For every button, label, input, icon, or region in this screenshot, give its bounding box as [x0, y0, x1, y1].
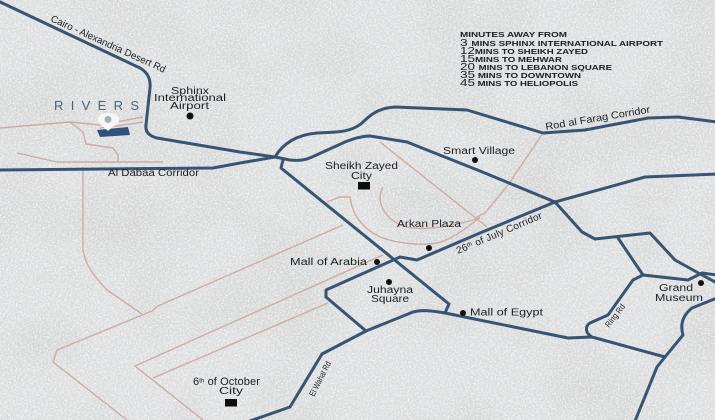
label: 6th of October City: th	[199, 378, 204, 384]
icon: location pin	[98, 113, 119, 131]
label: Juhayna Square: Square	[371, 294, 410, 305]
project logo: RIVERS: RIVERS	[54, 98, 139, 113]
label: 6th of October City: 6	[193, 376, 199, 388]
text block: minutes away from: 45 MINS TO HELIOPOLIS	[460, 77, 578, 89]
label: 26th of July Corridor: 26	[455, 242, 470, 257]
marker: Grand Museum	[698, 280, 704, 286]
label: Sheikh Zayed City: Sheikh Zayed	[325, 161, 398, 172]
label: Mall of Egypt: Mall of Egypt	[470, 308, 543, 318]
label: Juhayna Square: Juhayna	[367, 285, 414, 296]
project plot	[97, 127, 130, 137]
text block: minutes away from: 20 MINS TO LEBANON SQUARE	[460, 61, 612, 73]
label: 6th of October City	[193, 376, 260, 397]
label: Rod al Farag Corridor: Rod al Farag Corridor	[545, 104, 652, 133]
marker: Mall of Egypt	[460, 310, 466, 316]
text block: minutes away from: 3 MINS SPHINX INTERNATIONAL AIRPORT	[460, 37, 664, 49]
label: Sphinx International Airport	[154, 86, 226, 112]
marker: Juhayna Square	[386, 279, 392, 285]
label: Grand Museum: Museum	[655, 293, 703, 304]
label: Al Dabaa Corridor: Al Dabaa Corridor	[108, 168, 200, 179]
label: 26th of July Corridor: of July Corridor	[471, 210, 544, 250]
label: Sphinx International Airport: International	[154, 93, 226, 104]
text block: minutes away from: 12 MINS TO SHEIKH ZAYED	[460, 45, 589, 57]
label: Sheikh Zayed City: City	[351, 171, 372, 182]
label: Ring Rd: Ring Rd	[603, 302, 627, 329]
text block: minutes away from: 15 MINS TO MEHWAR	[460, 53, 563, 65]
marker: Sphinx Airport	[186, 112, 194, 120]
marker: 6th of October City	[225, 399, 237, 406]
text block: minutes away from	[460, 30, 664, 89]
secondary roads network	[0, 117, 543, 420]
label: Grand Museum: Grand	[659, 283, 693, 294]
marker: Sheikh Zayed City	[358, 182, 370, 190]
label: Mall of Arabia: Mall of Arabia	[290, 257, 368, 268]
text block: minutes away from: 35 MINS TO DOWNTOWN	[460, 69, 581, 81]
label: El Wahat Rd: El Wahat Rd	[307, 359, 333, 398]
label: Grand Museum	[655, 283, 703, 304]
label: Smart Village: Smart Village	[443, 146, 516, 157]
label: Sheikh Zayed City	[325, 161, 398, 182]
label: Sphinx International Airport: Sphinx	[171, 86, 209, 97]
label: 6th of October City: City	[219, 386, 243, 397]
marker: Smart Village	[472, 157, 478, 163]
label: Cairo - Alexandria Desert Rd: Cairo - Alexandria Desert Rd	[49, 14, 167, 76]
label: Juhayna Square	[367, 285, 414, 305]
label: Arkan Plaza: Arkan Plaza	[397, 219, 462, 230]
label: Sphinx International Airport: Airport	[170, 101, 209, 112]
marker: Mall of Arabia	[374, 259, 380, 265]
label: 26th of July Corridor: th	[466, 241, 473, 249]
text block: minutes away from: MINUTES AWAY FROM	[460, 30, 567, 39]
marker: Arkan Plaza	[426, 245, 432, 251]
label: 6th of October City: of October	[204, 376, 260, 388]
